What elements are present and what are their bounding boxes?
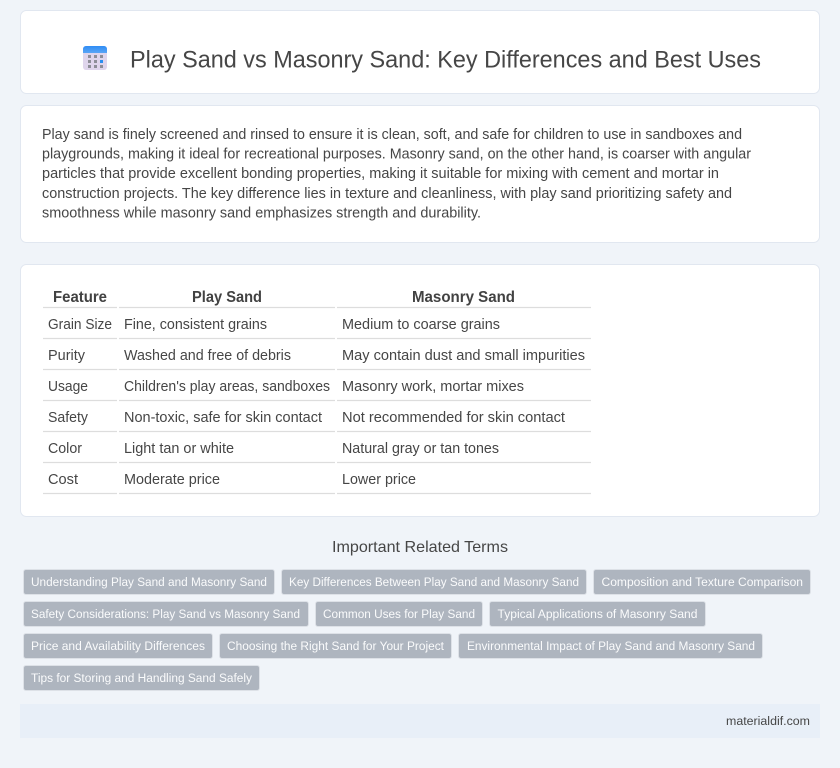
icon: calendar bbox=[83, 46, 107, 70]
tag bbox=[24, 666, 260, 690]
row: grain size bbox=[48, 317, 500, 333]
row: usage: Masonry work, mortar mixes bbox=[342, 379, 524, 395]
row: grain size: Grain Size bbox=[48, 317, 112, 333]
tag bbox=[24, 634, 212, 658]
title: Play Sand vs Masonry Sand: Key Differences and Best Uses bbox=[130, 46, 761, 74]
tag: Price and Availability Differences bbox=[31, 639, 205, 653]
row: color: Natural gray or tan tones bbox=[342, 441, 499, 457]
tag bbox=[458, 634, 762, 658]
tag: Tips for Storing and Handling Sand Safely bbox=[31, 671, 253, 685]
row: grain size: Fine, consistent grains bbox=[124, 317, 267, 333]
row: safety: Non-toxic, safe for skin contact bbox=[124, 410, 322, 426]
intro paragraph bbox=[42, 127, 751, 221]
row: usage: Children's play areas, sandboxes bbox=[124, 379, 330, 395]
footer: materialdif.com bbox=[726, 714, 810, 728]
tag: Understanding Play Sand and Masonry Sand bbox=[31, 575, 267, 589]
table header row: Masonry Sand bbox=[412, 289, 515, 306]
row: cost: Moderate price bbox=[124, 472, 220, 488]
tag: Common Uses for Play Sand bbox=[323, 607, 475, 621]
row: cost bbox=[48, 472, 416, 488]
tag: Safety Considerations: Play Sand vs Masonry Sand bbox=[31, 607, 300, 621]
tag bbox=[282, 570, 586, 594]
intro paragraph: construction projects. The key difference lies in texture and cleanliness, with play sand prioritizing safety and bbox=[42, 186, 732, 202]
intro paragraph: particles that provide excellent bonding properties, making it suitable for mixing with cement and mortar in bbox=[42, 166, 719, 182]
intro paragraph: Play sand is finely screened and rinsed to ensure it is clean, soft, and safe for children to use in sandboxes and bbox=[42, 127, 742, 143]
row: usage bbox=[48, 379, 524, 395]
table header row bbox=[53, 289, 515, 306]
tag bbox=[316, 602, 482, 626]
panel: comparison table bbox=[20, 264, 820, 516]
tag bbox=[594, 570, 810, 594]
footer bbox=[20, 704, 820, 738]
tag bbox=[490, 602, 706, 626]
tag bbox=[24, 570, 274, 594]
row: purity: May contain dust and small impurities bbox=[342, 348, 585, 364]
intro paragraph: smoothness while masonry sand emphasizes strength and durability. bbox=[42, 205, 481, 221]
row: purity bbox=[48, 348, 585, 364]
table header row: Feature bbox=[53, 289, 107, 306]
panel: title header bbox=[20, 10, 820, 94]
row: purity: Purity bbox=[48, 348, 86, 364]
row: grain size: Medium to coarse grains bbox=[342, 317, 500, 333]
row: color: Light tan or white bbox=[124, 441, 234, 457]
table header row: Play Sand bbox=[192, 289, 262, 306]
tag: Composition and Texture Comparison bbox=[602, 575, 803, 589]
row: purity: Washed and free of debris bbox=[124, 348, 291, 364]
tag: Key Differences Between Play Sand and Masonry Sand bbox=[289, 575, 579, 589]
tag bbox=[220, 634, 452, 658]
row: safety: Not recommended for skin contact bbox=[342, 410, 565, 426]
panel: introduction bbox=[20, 106, 820, 242]
tag: Typical Applications of Masonry Sand bbox=[498, 607, 698, 621]
row: safety: Safety bbox=[48, 410, 89, 426]
row: cost: Cost bbox=[48, 472, 78, 488]
tag bbox=[24, 602, 308, 626]
tag: Environmental Impact of Play Sand and Masonry Sand bbox=[467, 639, 755, 653]
row: color: Color bbox=[48, 441, 82, 457]
row: cost: Lower price bbox=[342, 472, 416, 488]
row: color bbox=[48, 441, 499, 457]
heading: related terms: Important Related Terms bbox=[332, 539, 508, 556]
tag: Choosing the Right Sand for Your Project bbox=[227, 639, 445, 653]
intro paragraph: playgrounds, making it ideal for recreational purposes. Masonry sand, on the other hand, is coarser with angular bbox=[42, 147, 751, 163]
related term tags bbox=[24, 570, 810, 690]
row: safety bbox=[48, 410, 565, 426]
row: usage: Usage bbox=[48, 379, 88, 395]
